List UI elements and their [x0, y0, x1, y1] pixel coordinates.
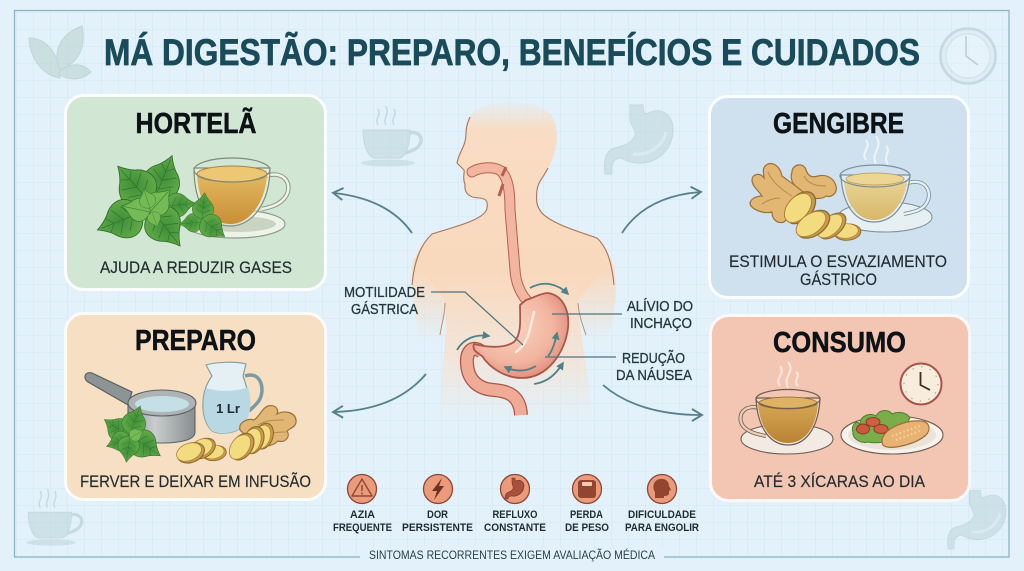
- label: redução da náusea: DA NÁUSEA: [616, 367, 692, 384]
- symptom: azia frequente: AZIA: [350, 509, 375, 521]
- body illustration: [412, 102, 616, 420]
- arrow: to consumo: [603, 385, 701, 415]
- panel: gengibre: [710, 96, 968, 298]
- symptom: dor persistente: PERSISTENTE: [402, 522, 473, 534]
- symptom: perda de peso: PERDA: [570, 509, 603, 521]
- arrow: to hortelã: [334, 193, 412, 233]
- panel: consumo: [710, 316, 970, 500]
- icon: saucepan: [85, 373, 196, 443]
- label: alívio do inchaço: ALÍVIO DO: [627, 298, 693, 315]
- label: redução da náusea: [545, 350, 692, 384]
- icon: faded tea cup bottom: [26, 489, 82, 546]
- icon: ginger tea cup: [838, 165, 932, 232]
- footer note: SINTOMAS RECORRENTES EXIGEM AVALIAÇÃO MÉDICA: [369, 549, 655, 562]
- icon: ginger root and slices: [750, 164, 861, 244]
- label: motilidade gástrica: GÁSTRICA: [351, 301, 418, 318]
- icon: mint leaves: [90, 149, 232, 257]
- icon: faded stomach top: [604, 105, 673, 174]
- label: alívio do inchaço: [552, 298, 693, 332]
- heading: hortelã: HORTELÃ: [136, 106, 257, 140]
- symptom: refluxo constante: [484, 474, 546, 534]
- symptom: refluxo constante: REFLUXO: [492, 509, 538, 521]
- icon: plate with salad and bread: [841, 410, 943, 454]
- motion arrows: [457, 284, 568, 384]
- icon: clock: [900, 364, 942, 404]
- caption: gengibre: [729, 252, 947, 289]
- label: redução da náusea: REDUÇÃO: [622, 350, 685, 367]
- digestive tract: [472, 168, 530, 304]
- symptom: dor persistente: [402, 474, 473, 534]
- icon: water jug: [203, 362, 262, 433]
- caption: hortelã: AJUDA A REDUZIR GASES: [100, 258, 292, 277]
- icon: faded mint leaves: [29, 26, 91, 79]
- heading: preparo: PREPARO: [135, 325, 256, 357]
- icon: tea cup with mint: [185, 158, 288, 238]
- icon: faded tea cup top: [361, 106, 421, 166]
- caption: consumo: ATÉ 3 XÍCARAS AO DIA: [754, 472, 926, 491]
- symptom: dificuldade para engolir: [625, 474, 699, 534]
- label: alívio do inchaço: INCHAÇO: [630, 316, 692, 332]
- jug volume label: 1 Lr: [216, 401, 240, 416]
- icon: ginger root: [225, 406, 296, 465]
- symptoms row: [333, 474, 699, 534]
- symptom: azia frequente: FREQUENTE: [333, 522, 392, 534]
- icon: ginger slices: [174, 434, 227, 467]
- caption: gengibre: ESTIMULA O ESVAZIAMENTO: [729, 252, 947, 271]
- arrow: to preparo: [334, 374, 426, 412]
- symptom: perda de peso: DE PESO: [565, 522, 609, 534]
- stomach: [473, 293, 568, 378]
- arms: [412, 258, 616, 342]
- icon: faded clock: [940, 28, 996, 84]
- arrow: to gengibre: [622, 192, 700, 233]
- symptom: azia frequente: [333, 474, 392, 534]
- caption: gengibre: GÁSTRICO: [800, 270, 877, 289]
- icon: mint sprig: [98, 402, 168, 467]
- symptom: perda de peso: [565, 474, 609, 534]
- label: motilidade gástrica: MOTILIDADE: [344, 285, 425, 301]
- symptom: dificuldade para engolir: DIFICULDADE: [628, 509, 696, 521]
- symptom: dificuldade para engolir: PARA ENGOLIR: [625, 522, 699, 534]
- icon: steam: [778, 362, 798, 388]
- panel: preparo: [66, 314, 326, 500]
- icon: faded stomach bottom: [948, 490, 1006, 549]
- heading: consumo: CONSUMO: [773, 327, 906, 359]
- panel: hortelã: [66, 96, 326, 290]
- symptom: dor persistente: DOR: [427, 509, 448, 521]
- icon: steam: [864, 136, 888, 164]
- symptom: refluxo constante: CONSTANTE: [484, 522, 546, 534]
- torso silhouette: [414, 102, 611, 420]
- label: motilidade gástrica: [344, 285, 523, 345]
- heading: gengibre: GENGIBRE: [773, 108, 904, 140]
- icon: tea cup on saucer: [740, 390, 833, 454]
- caption: preparo: FERVER E DEIXAR EM INFUSÃO: [80, 472, 311, 491]
